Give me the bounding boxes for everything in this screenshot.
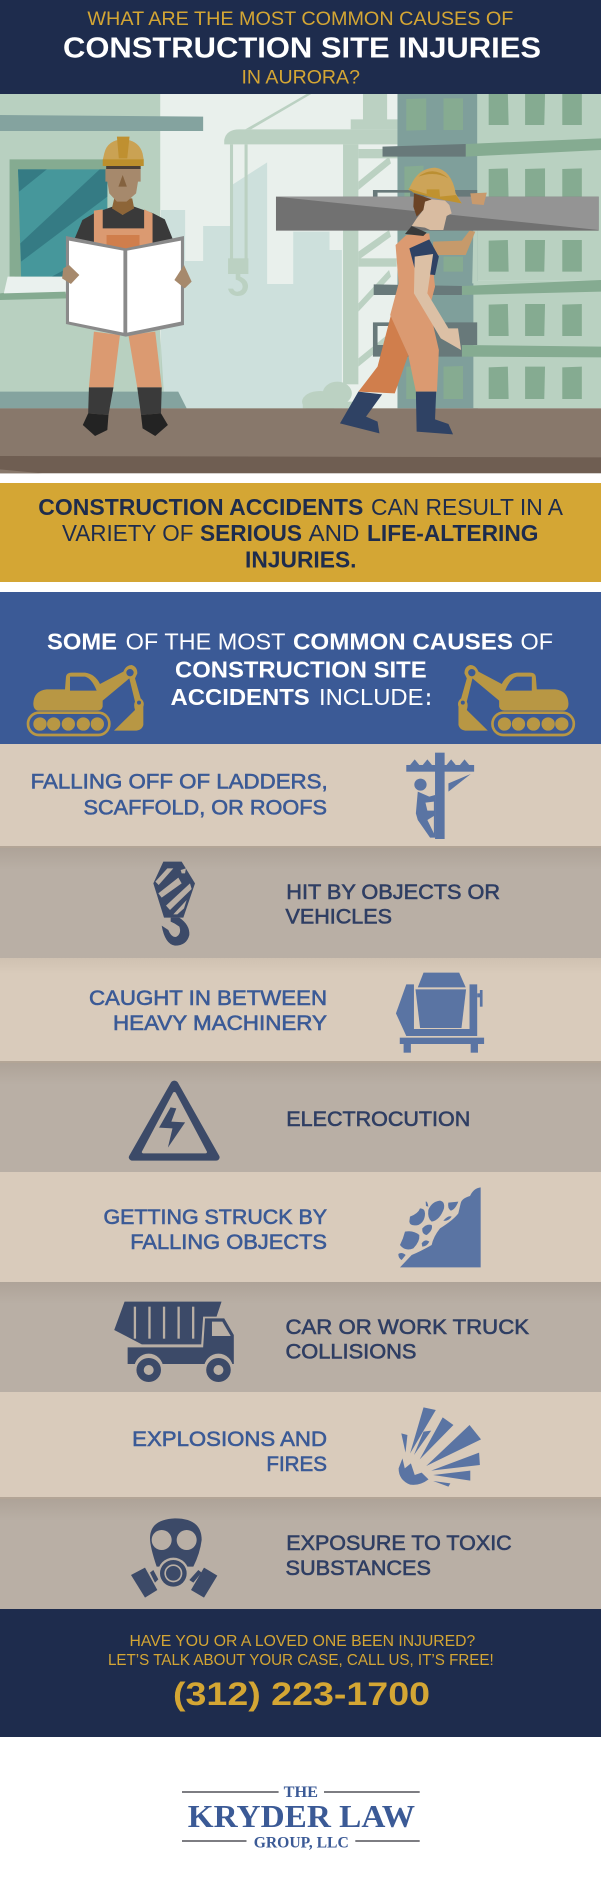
call to action panel: HAVE YOU OR A LOVED ONE BEEN INJURED? [130,1633,476,1650]
icon: rockslide [398,1187,481,1267]
panel: common causes heading: INCLUDE [319,684,424,710]
callout: gold statement band: VARIETY OF [62,520,194,546]
icon: dump truck [114,1302,234,1383]
panel: common causes heading: OF THE MOST [126,628,286,654]
panel: explosions and fires: FIRES [266,1453,327,1476]
worker head and hard hat [405,168,462,236]
panel: toxic substances: SUBSTANCES [286,1557,431,1580]
callout: gold statement band: INJURIES. [245,547,356,573]
worker reading plans [62,137,192,436]
worker carrying beam [276,193,599,434]
panel: explosions and fires: EXPLOSIONS AND [132,1428,327,1451]
logo: The Kryder Law Group: KRYDER LAW [188,1798,415,1834]
callout: gold statement band [0,483,601,582]
panel: common causes heading: ACCIDENTS [170,684,310,710]
callout: gold statement band: LIFE-ALTERING [367,520,538,546]
icon: excavator right [458,665,574,735]
panel: electrocution [0,1063,601,1172]
panel: caught in machinery [0,958,601,1063]
panel: falling objects [0,1172,601,1282]
panel: truck collisions [0,1282,601,1392]
panel: caught in machinery: HEAVY MACHINERY [113,1012,327,1035]
icon: excavator left [28,665,144,735]
panel: toxic substances: EXPOSURE TO TOXIC [286,1532,512,1555]
panel: common causes heading: CONSTRUCTION SITE [175,656,427,682]
panel: common causes heading: SOME [47,628,117,654]
panel: falling off ladders [0,744,601,848]
panel: explosions and fires [0,1392,601,1499]
callout: gold statement band: AND [308,520,360,546]
panel: common causes heading: : [426,684,432,710]
panel: caught in machinery: CAUGHT IN BETWEEN [89,987,327,1010]
header banner: IN AURORA? [242,66,360,88]
header banner [0,0,601,94]
panel: electrocution: ELECTROCUTION [286,1108,470,1131]
panel: common causes heading: COMMON CAUSES [293,628,513,654]
callout: gold statement band: CAN RESULT IN A [371,494,564,520]
panel: falling off ladders: FALLING OFF OF LADDERS, [31,770,328,793]
logo: The Kryder Law Group [182,1784,420,1851]
call to action panel: LET’S TALK ABOUT YOUR CASE, CALL US, IT’S FREE! [108,1652,494,1669]
icon: worker climbing utility pole [406,753,474,839]
panel: falling objects: GETTING STRUCK BY [104,1206,327,1229]
icon: cement mixer [396,973,484,1053]
icon: explosion burst [399,1407,481,1487]
logo: The Kryder Law Group: GROUP, LLC [254,1834,349,1851]
panel: toxic substances [0,1499,601,1609]
panel: hit by objects: VEHICLES [286,905,392,928]
panel: truck collisions: COLLISIONS [286,1341,416,1364]
header banner: WHAT ARE THE MOST COMMON CAUSES OF [87,8,513,30]
icon: electrical hazard triangle [133,1084,216,1157]
panel: falling off ladders: SCAFFOLD, OR ROOFS [84,796,327,819]
call to action panel: (312) 223-1700 [173,1676,430,1712]
panel: hit by objects [0,848,601,958]
panel: truck collisions: CAR OR WORK TRUCK [286,1316,529,1339]
icon: gas mask [131,1518,217,1598]
panel: falling objects: FALLING OBJECTS [130,1231,327,1254]
panel: hit by objects: HIT BY OBJECTS OR [286,881,500,904]
illustration: construction site with two workers [0,94,601,473]
callout: gold statement band: SERIOUS [200,520,302,546]
panel: common causes heading: OF [520,628,553,654]
call to action panel [0,1609,601,1737]
logo: The Kryder Law Group: THE [284,1784,318,1801]
icon: crane hook [153,862,195,946]
callout: gold statement band: CONSTRUCTION ACCIDENTS [38,494,363,520]
header banner: CONSTRUCTION SITE INJURIES [63,33,541,65]
panel: common causes heading [0,592,601,744]
